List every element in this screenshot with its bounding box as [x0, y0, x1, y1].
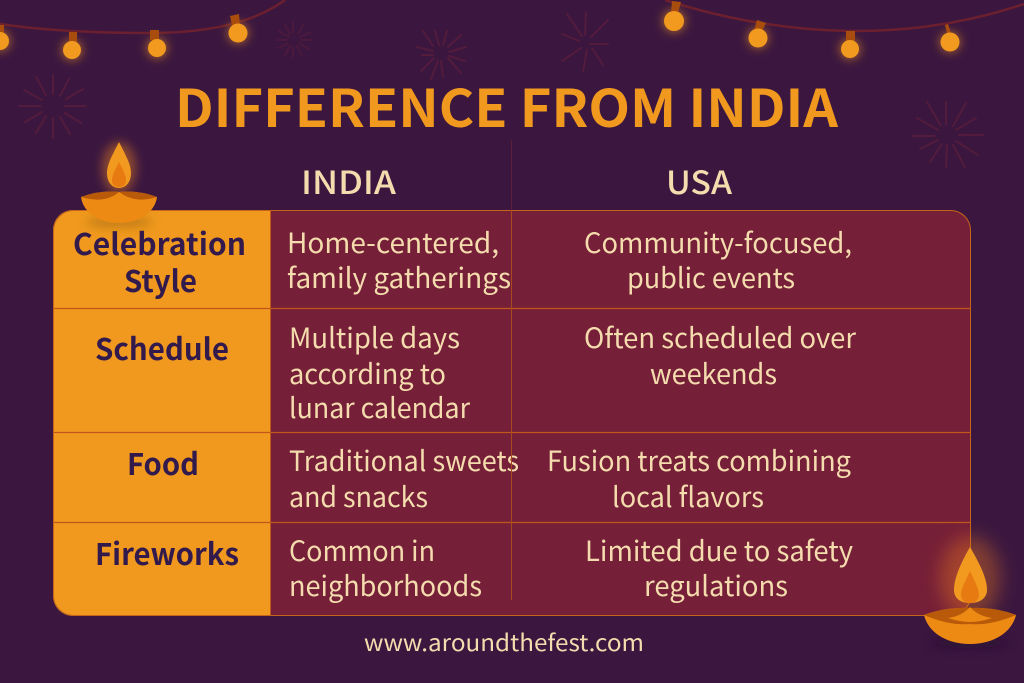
row: fireworks: Limited due to safety: [585, 530, 853, 570]
row: food: Food: [127, 440, 199, 484]
row: food: and snacks: [289, 476, 428, 516]
row: celebration style: Style: [124, 257, 197, 301]
row: fireworks: regulations: [644, 565, 788, 605]
row: food: local flavors: [612, 476, 764, 516]
row: food: [127, 440, 851, 516]
row: fireworks: neighborhoods: [289, 565, 482, 605]
row: schedule: according to: [289, 353, 446, 393]
icon: diya lamp bottom right: [924, 536, 1016, 648]
string lights: right: [663, 0, 1024, 59]
row: schedule: weekends: [650, 353, 777, 393]
row: schedule: [95, 317, 856, 427]
column heading: USA: USA: [666, 158, 732, 204]
row: celebration style: Celebration: [73, 220, 246, 264]
row: fireworks: [95, 530, 853, 605]
row: celebration style: family gatherings: [287, 257, 511, 297]
comparison table: [53, 210, 971, 616]
row: celebration style: [73, 220, 852, 301]
row: celebration style: public events: [627, 257, 795, 297]
row: food: Traditional sweets: [289, 440, 519, 480]
string lights: left: [0, 0, 285, 60]
row: celebration style: Community-focused,: [584, 222, 852, 262]
row: schedule: Often scheduled over: [584, 317, 856, 357]
row: food: Fusion treats combining: [547, 440, 851, 480]
icon: diya lamp top left: [81, 142, 157, 227]
row: schedule: lunar calendar: [289, 387, 470, 427]
fireworks background: [19, 12, 983, 168]
row: fireworks: Fireworks: [95, 530, 239, 574]
footer website: www.aroundthefest.com: [364, 624, 644, 658]
row: celebration style: Home-centered,: [287, 222, 499, 262]
title: DIFFERENCE FROM INDIA: [175, 67, 839, 142]
row: fireworks: Common in: [289, 530, 435, 570]
row: schedule: Schedule: [95, 325, 229, 369]
row: schedule: Multiple days: [289, 317, 460, 357]
column heading: India: INDIA: [301, 158, 396, 204]
